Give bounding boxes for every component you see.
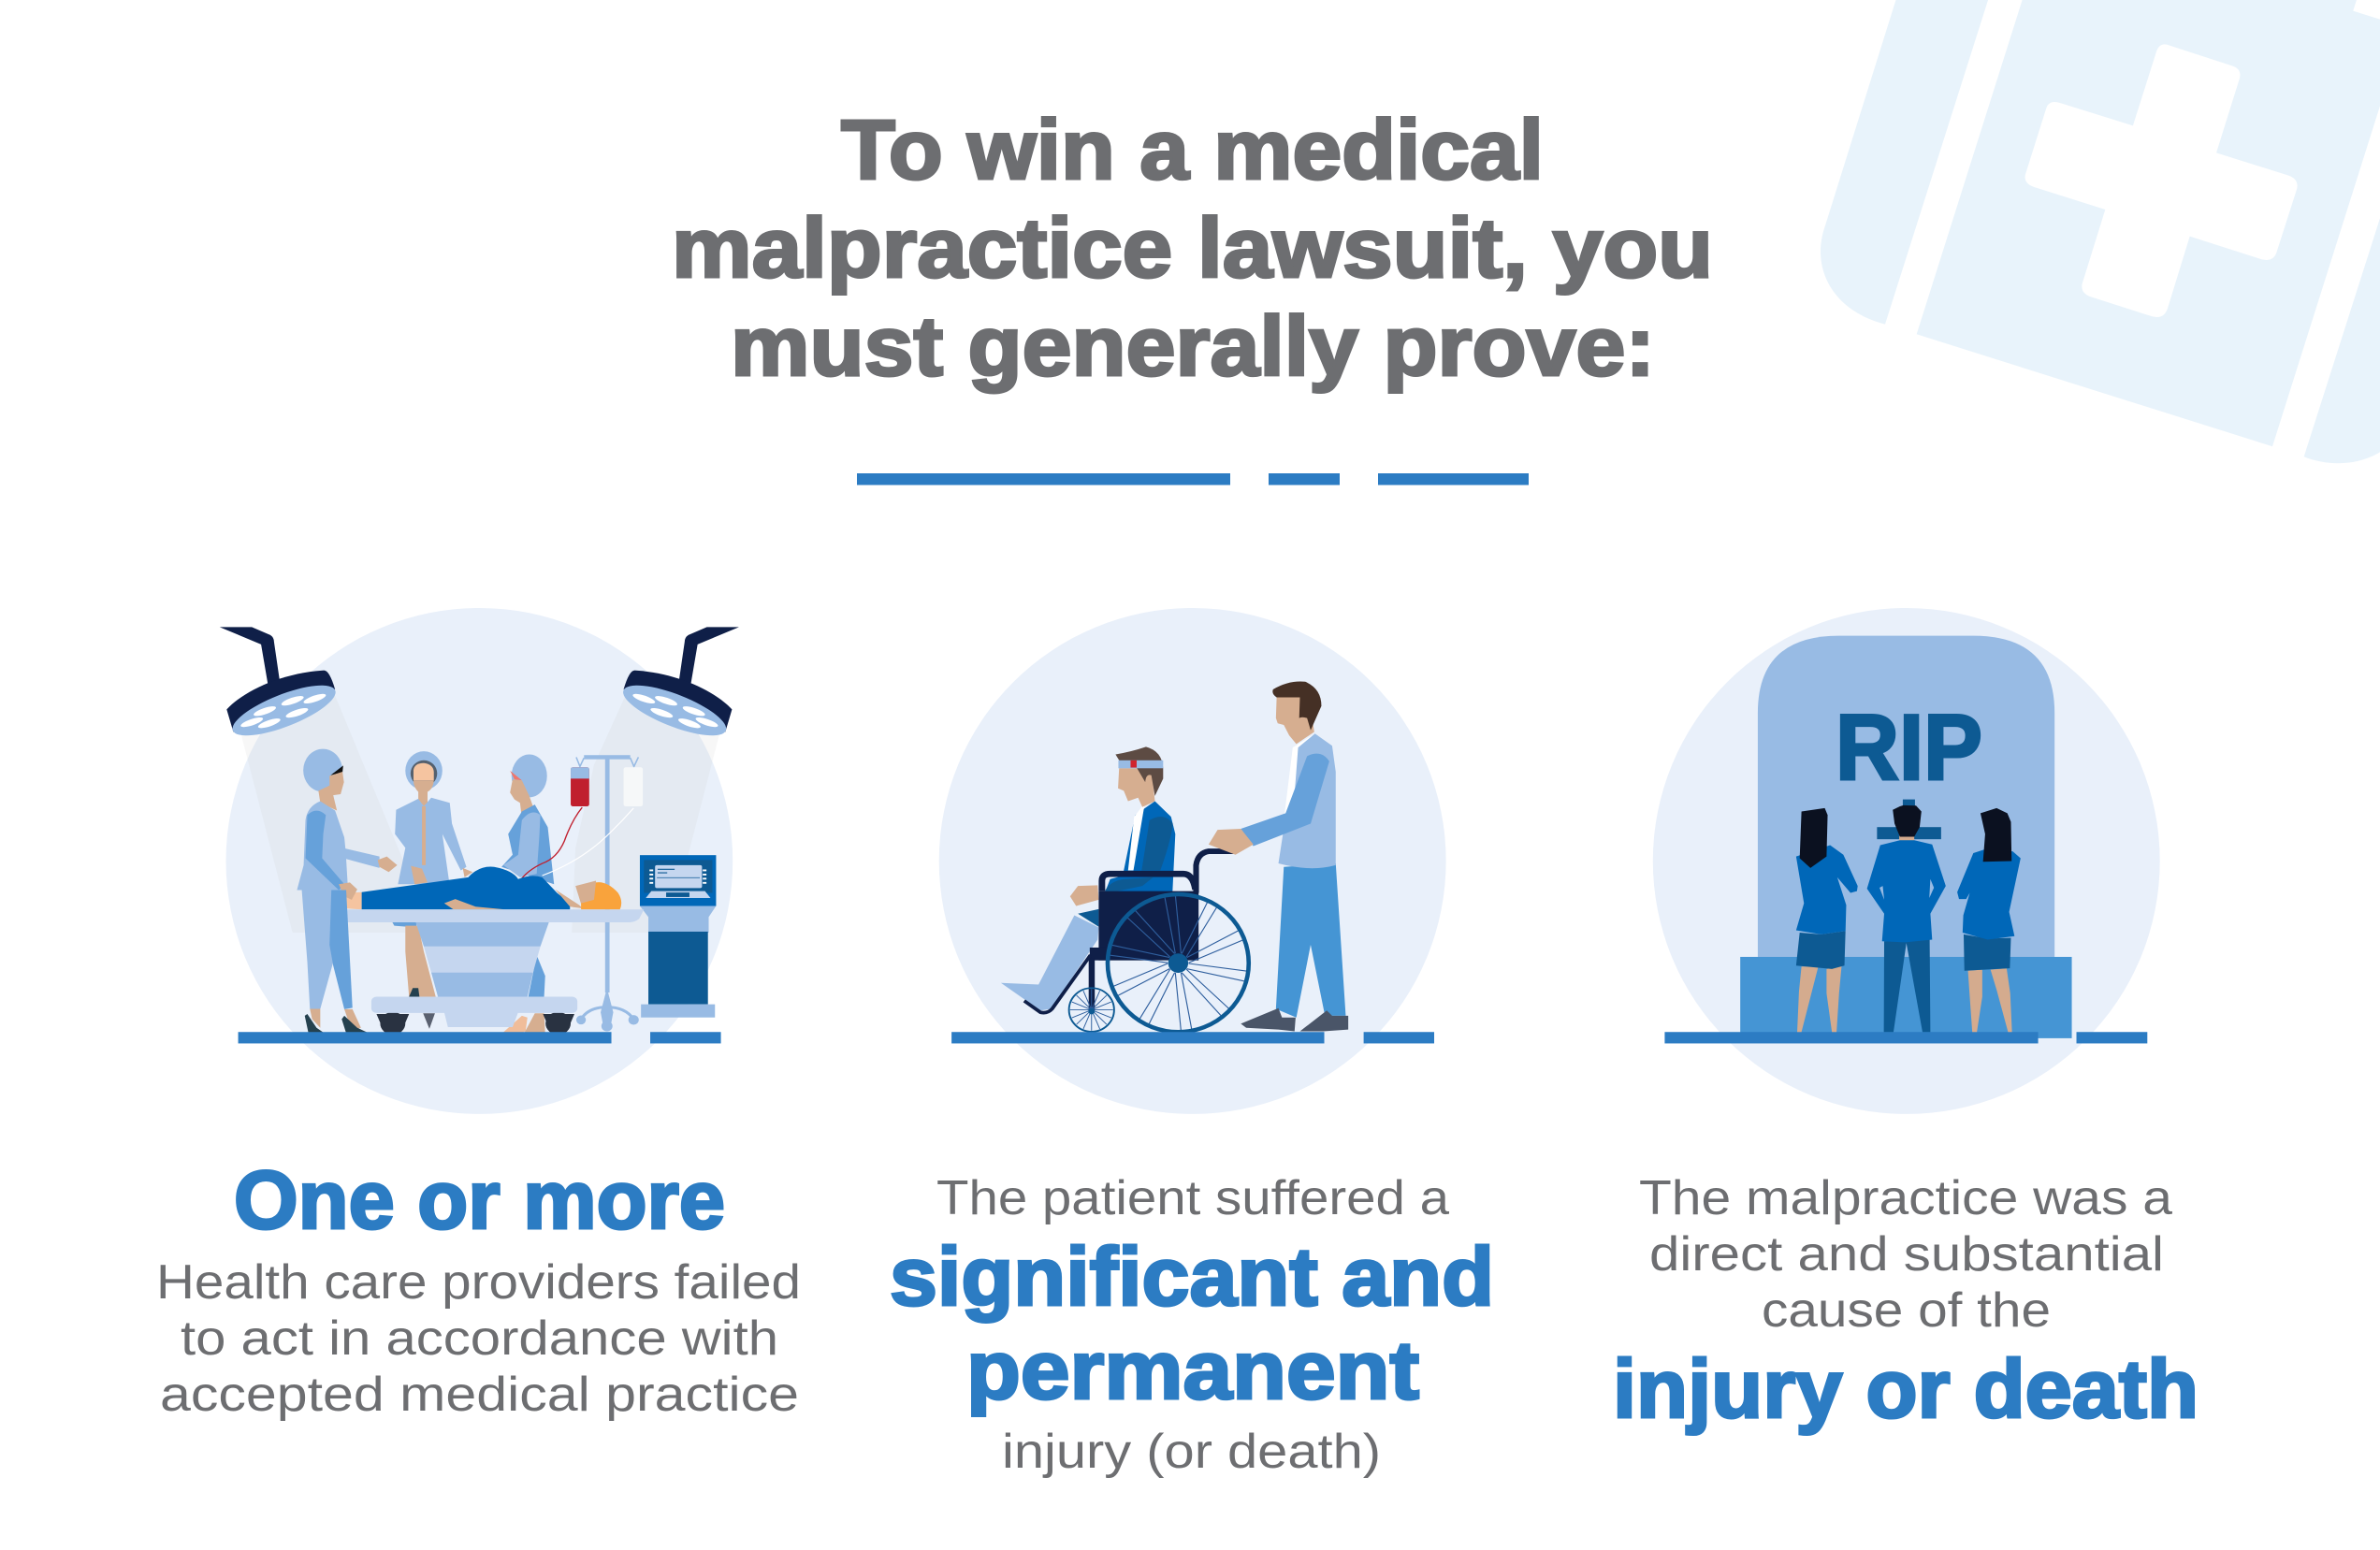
title: must generally prove: bbox=[731, 300, 1655, 394]
gravestone inscription: RIP bbox=[1836, 695, 1982, 799]
text block: injury or death: direct and substantial bbox=[1649, 1227, 2164, 1282]
text block: one or more bbox=[156, 1153, 801, 1422]
title: malpractice lawsuit, you bbox=[672, 202, 1713, 296]
title divider bbox=[857, 473, 1529, 485]
monitor on cart bbox=[640, 855, 716, 1018]
text block: one or more: accepted medical practice bbox=[160, 1368, 799, 1422]
gravestone bbox=[1740, 636, 2072, 1038]
text block: one or more: to act in accordance with bbox=[181, 1311, 778, 1366]
caregiver pushing wheelchair bbox=[1209, 682, 1348, 1031]
title: To win a medical bbox=[841, 104, 1544, 197]
background circle bbox=[226, 608, 733, 1114]
text block: significant and permanent: significant and bbox=[890, 1230, 1494, 1323]
floor line bbox=[239, 1032, 721, 1043]
title bbox=[672, 104, 1713, 394]
background circle bbox=[1653, 608, 2160, 1114]
floor line bbox=[951, 1032, 1434, 1043]
illustration: mourners at gravestone bbox=[1653, 608, 2160, 1114]
nurse centre bbox=[392, 751, 472, 1029]
left surgical lamp bbox=[220, 627, 341, 746]
patient on table bbox=[346, 867, 621, 909]
nurse left bbox=[297, 749, 398, 1037]
wheelchair bbox=[1024, 851, 1250, 1032]
text block: injury or death: cause of the bbox=[1762, 1283, 2051, 1338]
illustration: operating room bbox=[220, 608, 739, 1114]
text block: one or more: One or more bbox=[234, 1153, 725, 1246]
text block: significant and permanent: permanent bbox=[966, 1324, 1419, 1416]
background icon: medical kit with cross bbox=[1821, 0, 2380, 463]
mourner left bbox=[1796, 808, 1858, 1032]
light beams bbox=[240, 696, 719, 933]
illustration: patient in wheelchair bbox=[939, 608, 1446, 1114]
background circle bbox=[939, 608, 1446, 1114]
text block: injury or death bbox=[1613, 1171, 2199, 1435]
text block: injury or death: injury or death bbox=[1613, 1342, 2199, 1435]
right surgical lamp bbox=[617, 627, 739, 746]
text block: significant and permanent bbox=[890, 1171, 1494, 1479]
mourner centre bbox=[1867, 805, 1946, 1032]
floor line bbox=[1664, 1032, 2147, 1043]
patient in wheelchair bbox=[1001, 746, 1175, 1010]
IV stand with blood and saline bags bbox=[520, 755, 643, 1031]
text block: one or more: Health care providers failed bbox=[156, 1255, 801, 1310]
text block: significant and permanent: The patient suffered a bbox=[936, 1171, 1449, 1225]
operating table bbox=[346, 909, 644, 1035]
mourner right bbox=[1957, 808, 2021, 1032]
nurse right bbox=[500, 754, 554, 1037]
text block: injury or death: The malpractice was a bbox=[1639, 1171, 2172, 1225]
text block: significant and permanent: injury (or death) bbox=[1002, 1425, 1381, 1479]
